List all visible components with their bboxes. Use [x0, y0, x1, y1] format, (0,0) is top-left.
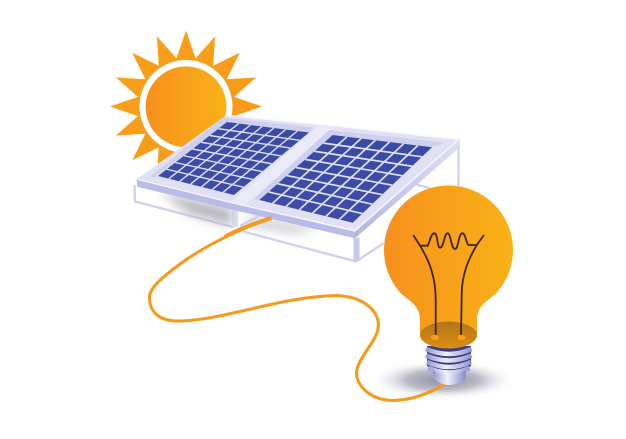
- left module recess: [151, 118, 314, 178]
- glass collar: [420, 322, 477, 348]
- shadow under panel: [160, 192, 318, 234]
- bulb ground shadow: [369, 360, 517, 400]
- right module cells: [259, 135, 432, 223]
- filament: [413, 233, 484, 337]
- cable: [149, 218, 445, 400]
- bulb base cap: [432, 370, 466, 385]
- right module recess: [254, 130, 444, 200]
- panel stand: [134, 146, 458, 262]
- panel top frame: [137, 115, 460, 232]
- glass globe: [384, 185, 513, 348]
- divider between the two modules: [231, 126, 334, 205]
- frame highlights: [138, 116, 459, 230]
- panel front face: [137, 179, 355, 238]
- left module cells: [158, 122, 309, 195]
- bulb screw base: [426, 346, 472, 385]
- sun: [110, 30, 262, 182]
- solar panel: [137, 115, 460, 238]
- light bulb: [384, 185, 513, 385]
- filament contacts: [431, 335, 466, 340]
- panel right side face: [355, 139, 460, 238]
